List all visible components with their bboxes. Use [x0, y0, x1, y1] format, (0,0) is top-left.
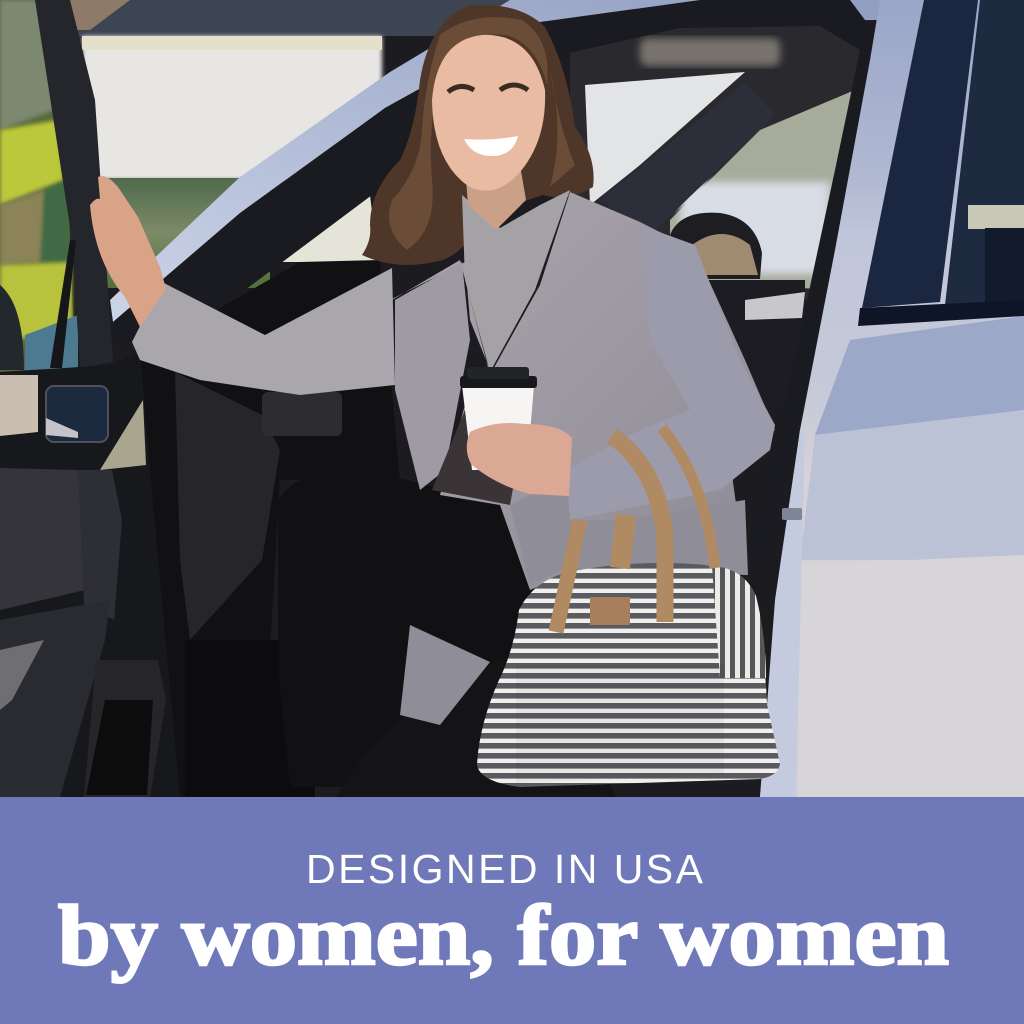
neck [465, 165, 526, 230]
right sleeve [566, 225, 775, 520]
cardigan torso panel [395, 262, 470, 490]
coffee cup [460, 367, 537, 470]
rear windscreen and side windows inside the car [280, 25, 865, 410]
hair highlights [389, 17, 575, 250]
bag front pocket shading [516, 665, 724, 783]
light inner garment near the knee [400, 625, 490, 725]
car interior dashboard and seat [130, 260, 400, 797]
left arm sleeve [132, 268, 395, 395]
left hand on door [90, 176, 166, 327]
hair back [362, 5, 594, 265]
turtleneck [462, 190, 570, 372]
dark top at waist [432, 410, 520, 505]
eyes and brows [448, 85, 528, 92]
brown label on bag [590, 597, 630, 625]
photo: woman stepping out of a car with a striped bag [0, 0, 1024, 797]
headline: by women, for women [58, 887, 949, 983]
hand holding cup [467, 423, 572, 496]
woman's black trousers [278, 470, 538, 787]
bag body with stripes [477, 563, 780, 787]
car body on the right [760, 0, 1024, 797]
cardigan body [390, 192, 775, 590]
bag side panel with vertical stripes [712, 566, 766, 678]
smile [464, 136, 518, 156]
coat lower panel [510, 480, 748, 585]
open car door with window [0, 0, 180, 797]
face [432, 35, 545, 191]
subheading: DESIGNED IN USA [306, 846, 704, 892]
woman's lower leg [336, 657, 616, 797]
bag straps [556, 428, 715, 632]
banner [0, 797, 1024, 1024]
outdoor background [0, 0, 1024, 797]
car roof and A-pillar [110, 0, 920, 600]
